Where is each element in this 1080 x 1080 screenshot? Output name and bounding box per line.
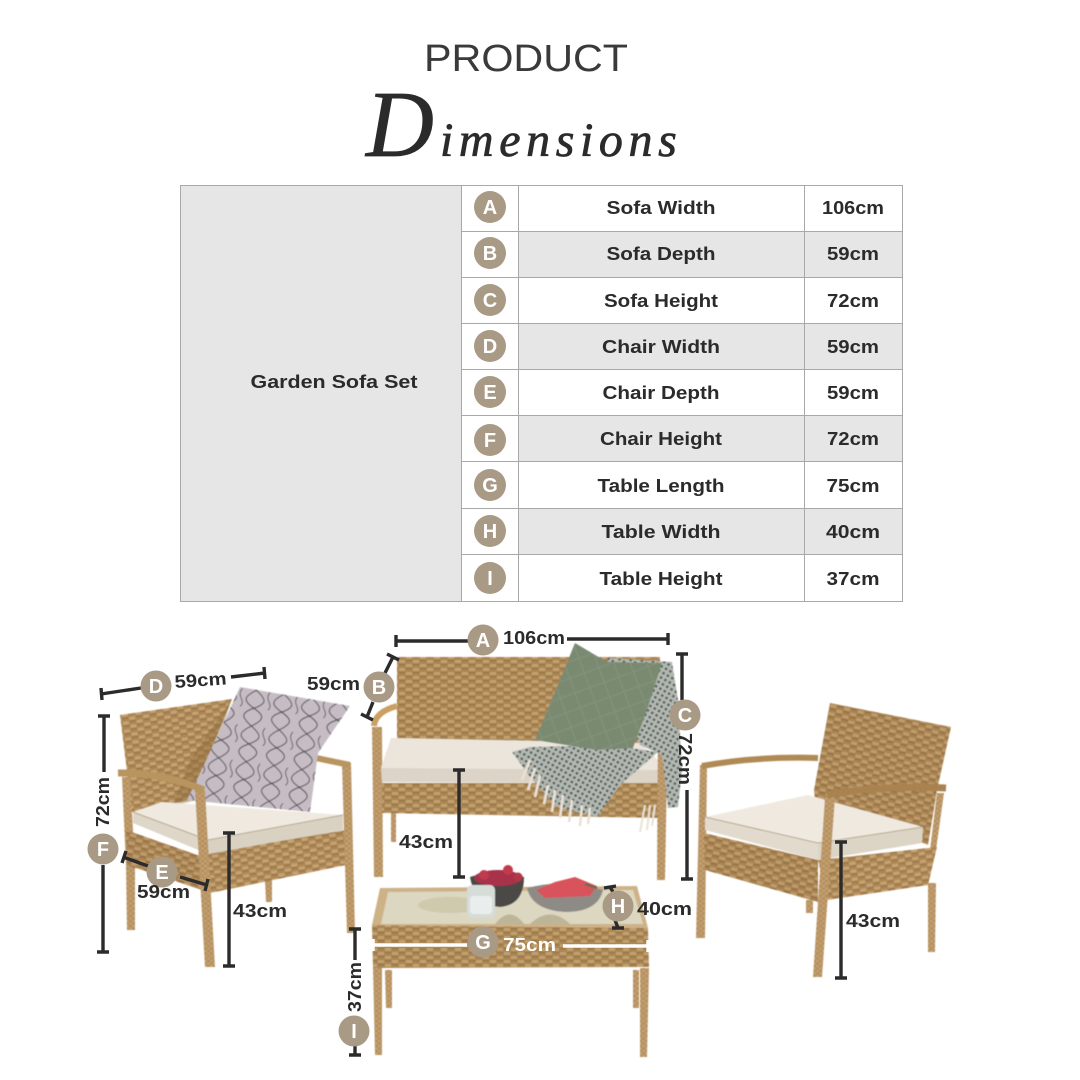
dimension G: table length: G [475, 932, 491, 954]
row E: Chair Depth [602, 383, 720, 403]
seat height: right chair: 43cm [846, 911, 900, 931]
furniture: coffee table with fruit bowls [372, 865, 649, 1057]
throw blanket [512, 658, 682, 832]
row F [462, 416, 902, 462]
dimensions table [180, 186, 902, 602]
title [364, 38, 682, 177]
row I: Table Height [600, 569, 722, 589]
fruit bowl: raspberries [470, 865, 524, 907]
row E [462, 370, 902, 416]
row I: I [487, 568, 493, 590]
row H [462, 508, 902, 554]
dimension I: table height: I [351, 1021, 357, 1043]
dimension D: chair width [101, 667, 265, 702]
dimension F: chair height: F [97, 839, 109, 861]
row B: Sofa Depth [606, 244, 716, 264]
dimension H: table width [602, 886, 692, 928]
dimension I: table height [338, 929, 370, 1055]
pillow: green cushion [535, 643, 662, 750]
fruit bowl: watermelon [527, 877, 603, 912]
row D: Chair Width [602, 337, 720, 357]
row E: E [483, 382, 497, 404]
dimension B: sofa depth: 59cm [307, 674, 360, 694]
row B [462, 232, 902, 278]
row I: 37cm [826, 569, 880, 589]
glass [467, 885, 495, 918]
row H: Table Width [602, 522, 720, 542]
dimension D: chair width: D [149, 676, 163, 698]
heading: Dimensions: D [364, 73, 434, 177]
row D: 59cm [827, 337, 879, 357]
row F: F [484, 430, 496, 452]
row E: 59cm [827, 383, 879, 403]
dimension I: table height: 37cm [345, 962, 365, 1012]
seat height: left chair: 43cm [233, 901, 287, 921]
dimension G: table length: 75cm [503, 935, 556, 955]
row F: 72cm [827, 429, 879, 449]
row H: H [483, 521, 497, 543]
furniture: sofa [372, 643, 682, 880]
dimension G: table length [373, 926, 648, 958]
dimension B: sofa depth: B [372, 677, 386, 699]
dimension E: chair depth: 59cm [137, 882, 190, 902]
heading: PRODUCT: PRODUCT [424, 38, 628, 80]
dimension F: chair height [88, 716, 118, 952]
furniture: left armchair [118, 687, 355, 967]
row F: Chair Height [600, 429, 722, 449]
seat height: sofa: 43cm [399, 832, 453, 852]
row A: Sofa Width [606, 198, 716, 218]
dimension A: sofa width: A [476, 630, 490, 652]
row G: Table Length [598, 476, 724, 496]
dimension D: chair width: 59cm [174, 668, 227, 692]
dimension F: chair height: 72cm [93, 777, 113, 827]
row G: 75cm [826, 476, 880, 496]
dimension E: chair depth [122, 851, 208, 902]
row D: D [483, 336, 497, 358]
furniture: right armchair [696, 703, 951, 977]
heading: Dimensions: imensions [440, 114, 682, 167]
row A: 106cm [822, 198, 884, 218]
row H: 40cm [826, 522, 880, 542]
row G: G [482, 475, 498, 497]
dimension H: table width: H [611, 896, 625, 918]
dimension C: sofa height: C [678, 705, 692, 727]
row C: C [483, 290, 497, 312]
panel: product name cell [180, 186, 462, 602]
row A: A [483, 197, 497, 219]
pillow: patterned grey cushion [187, 687, 350, 812]
dimension H: table width: 40cm [637, 899, 692, 919]
dimension A: sofa width [396, 624, 668, 656]
row A [462, 186, 902, 232]
row C [462, 278, 902, 324]
row C: 72cm [827, 291, 879, 311]
dimension C: sofa height [670, 654, 700, 879]
dimension E: chair depth: E [155, 862, 169, 884]
row G [462, 462, 902, 508]
panel: product name cell: Garden Sofa Set [250, 372, 418, 392]
seat height: sofa [399, 770, 465, 877]
row D [462, 324, 902, 370]
seat height: right chair [835, 842, 900, 978]
dimension C: sofa height: 72cm [675, 733, 695, 785]
row C: Sofa Height [604, 291, 718, 311]
dimension B: sofa depth [307, 654, 399, 720]
row B: B [483, 243, 497, 265]
row B: 59cm [827, 244, 879, 264]
dimension A: sofa width: 106cm [503, 628, 565, 648]
row I [462, 554, 902, 602]
seat height: left chair [223, 833, 287, 966]
